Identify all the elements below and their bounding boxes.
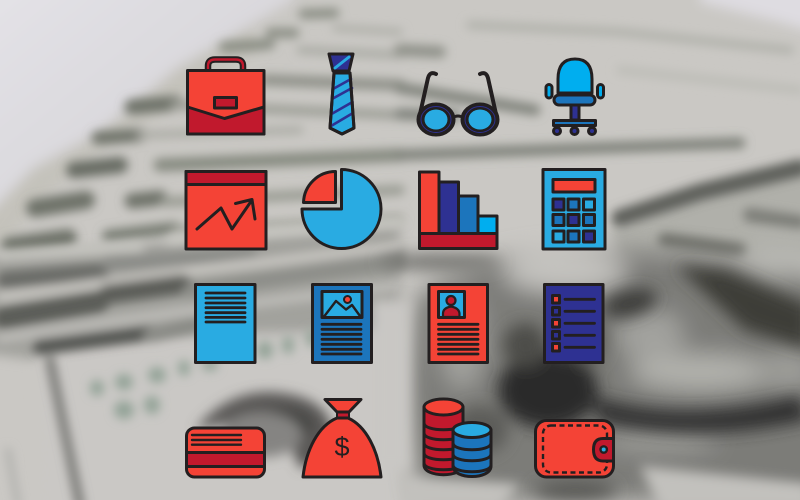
icon grid [186,54,614,477]
icon: line chart panel [186,172,266,249]
icon: necktie [329,54,354,134]
icon: resume [429,284,488,362]
icon: document with image [312,284,372,362]
icon: coin stacks [424,399,491,476]
icon: money bag [303,400,381,477]
icon: pie chart [302,170,381,249]
icon: calculator [543,170,605,249]
background: oval portrait left [195,392,333,468]
dollar sign: $ [334,432,350,462]
icon: checklist [544,284,603,362]
icon: briefcase [188,60,264,134]
icon: credit card [186,428,264,477]
icon: office chair [546,59,604,134]
icon: bar chart [420,172,497,248]
icon: wallet [536,420,614,477]
icon: text document [196,284,255,362]
background: large banknote portrait [372,246,800,500]
icon: glasses [418,73,498,134]
